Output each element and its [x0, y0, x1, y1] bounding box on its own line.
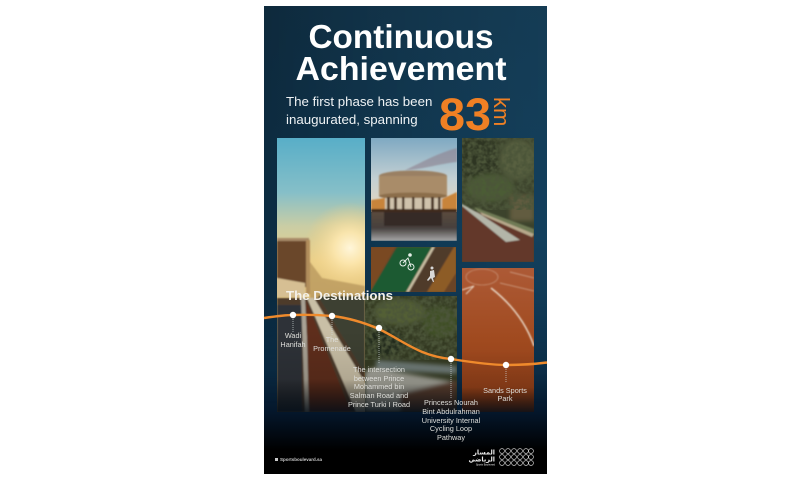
stop: Princess Nourah University: Pathway: [437, 433, 465, 442]
website link: Sportsboulevard.sa: [280, 457, 323, 462]
stop: road intersection: between Prince: [354, 374, 404, 383]
stop: road intersection: [348, 325, 410, 409]
poster background: [264, 6, 547, 474]
stop: The Promenade: [313, 313, 351, 353]
stop: Sands Sports Park: [483, 362, 527, 403]
stat: 83 km: [439, 89, 514, 140]
stop: road intersection: Salman Road and: [350, 391, 408, 400]
stat: 83 km: 83: [439, 89, 491, 140]
logo: Sports Boulevard: [469, 449, 533, 466]
stop: Princess Nourah University: University Internal: [422, 416, 481, 425]
photo: river and trees: [365, 296, 458, 412]
photo: tree-lined path: [462, 138, 534, 262]
stop: Princess Nourah University: Cycling Loop: [430, 424, 472, 433]
stop: Sands Sports Park: Sands Sports: [483, 386, 527, 395]
stop: Princess Nourah University: Princess Nourah: [424, 398, 478, 407]
photo: bike and pedestrian lanes: [369, 247, 456, 292]
route line: [264, 315, 547, 365]
heading: the destinations: The Destinations: [286, 289, 393, 303]
stop: road intersection: Mohammed bin: [354, 382, 404, 391]
subtitle: The first phase has been: [286, 94, 432, 109]
stop: Wadi Hanifah: Hanifah: [280, 340, 306, 349]
stop: Wadi Hanifah: Wadi: [285, 331, 302, 340]
logo: Sports Boulevard: Sports Boulevard: [476, 464, 496, 466]
stop: road intersection: Prince Turki I Road: [348, 400, 410, 409]
stop: Princess Nourah University: Bint Abdulrahman: [422, 407, 480, 416]
stop: The Promenade: Promenade: [313, 344, 351, 353]
subtitle: inaugurated, spanning: [286, 112, 418, 127]
stop: Wadi Hanifah: [280, 312, 306, 349]
photo: circular building: [371, 138, 457, 241]
stop: road intersection: The intersection: [353, 365, 405, 374]
logo: Sports Boulevard: الرياضي: [469, 456, 495, 464]
stat: 83 km: km: [489, 97, 514, 126]
stop: Princess Nourah University: [422, 356, 481, 442]
logo: Sports Boulevard: المسار: [472, 450, 495, 456]
stop: Sands Sports Park: Park: [497, 394, 513, 403]
stop: The Promenade: The: [326, 335, 338, 344]
title second line: Achievement: [296, 50, 507, 87]
photo: sunset walkway: [277, 138, 365, 412]
title: Continuous: [308, 18, 494, 55]
subtitle: [286, 94, 432, 127]
photo: sands sports track: [462, 268, 534, 412]
